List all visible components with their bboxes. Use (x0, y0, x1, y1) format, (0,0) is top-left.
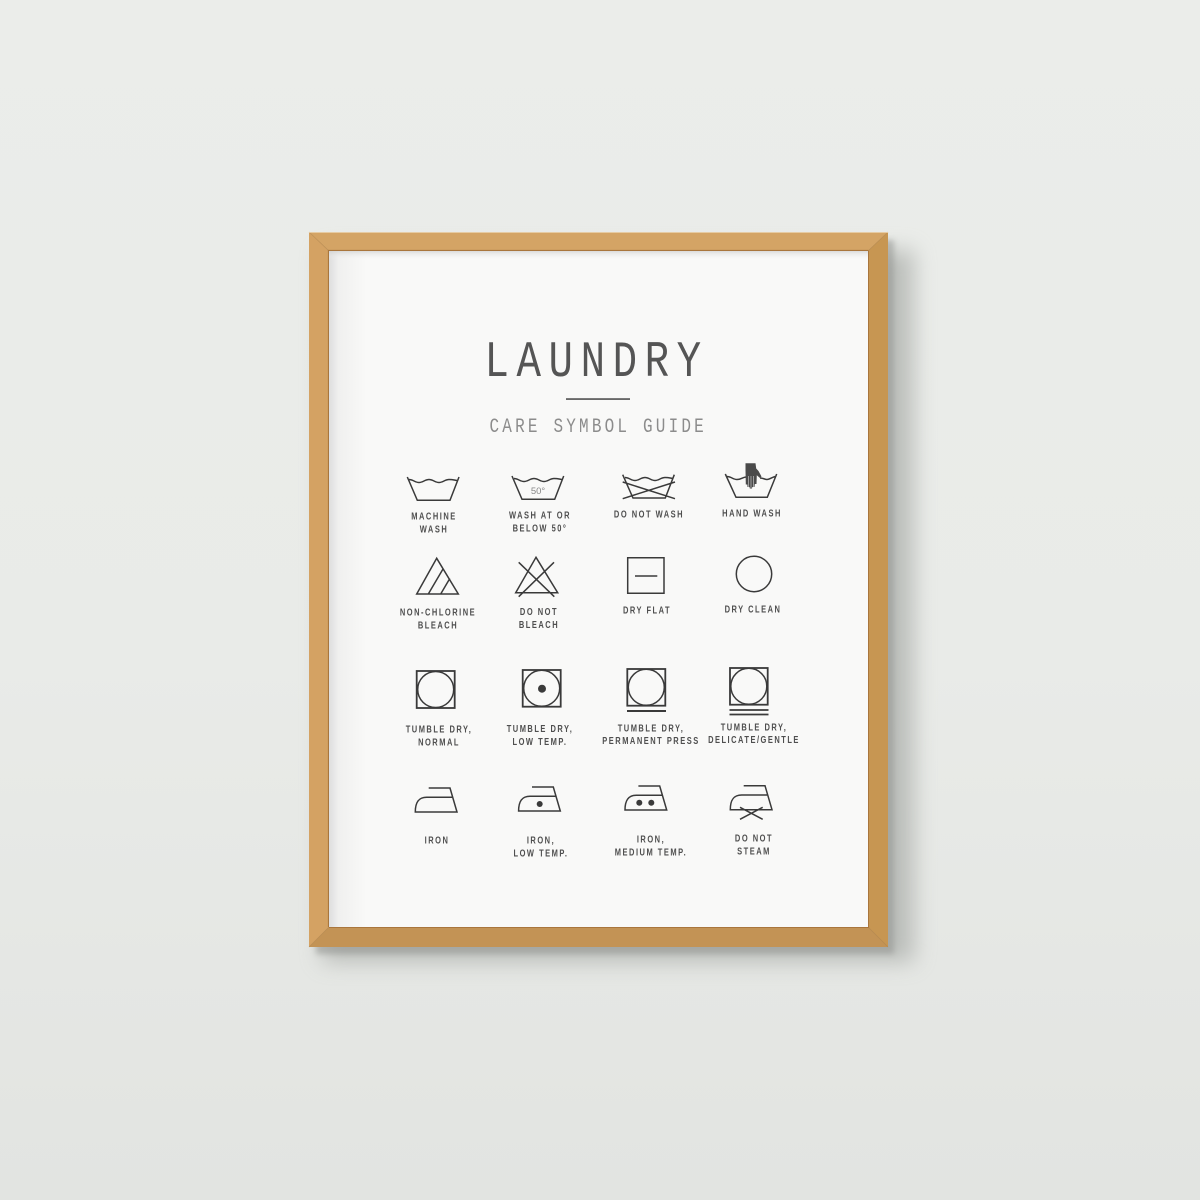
symbol: do not wash (614, 475, 684, 520)
label: machine wash: WASH (420, 523, 448, 535)
symbol: iron medium (615, 786, 687, 858)
label: iron: IRON (425, 834, 449, 846)
label: iron low: IRON, (527, 834, 555, 846)
label: iron medium: MEDIUM TEMP. (615, 846, 687, 858)
label: wash at or below 50: WASH AT OR (509, 509, 571, 521)
label: non-chlorine bleach: NON-CHLORINE (400, 606, 476, 618)
label: tumble dry normal: NORMAL (418, 736, 460, 748)
label: iron medium: IRON, (637, 833, 665, 845)
label: do not wash: DO NOT WASH (614, 508, 684, 520)
label: machine wash: MACHINE (411, 510, 457, 522)
symbol: hand wash (722, 463, 782, 519)
symbol: iron (415, 788, 457, 846)
symbol: tumble dry delicate (708, 668, 800, 745)
icon: crossed triangle (516, 557, 558, 597)
symbol: tumble dry low (507, 670, 573, 747)
symbol: iron low (514, 787, 568, 859)
label: wash at or below 50: BELOW 50° (513, 522, 567, 534)
label: tumble dry delicate: TUMBLE DRY, (721, 721, 787, 733)
symbol: do not bleach (516, 557, 559, 630)
label: dry clean: DRY CLEAN (725, 603, 781, 615)
icon: circle (736, 556, 772, 592)
icon: striped triangle (417, 558, 458, 594)
icon: crossed iron (730, 786, 772, 819)
title: LAUNDRY (484, 334, 701, 391)
icon: tub with 50 degrees: 50° (531, 486, 545, 497)
label: do not bleach: BLEACH (519, 619, 559, 630)
label: do not steam: STEAM (737, 845, 771, 857)
label: tumble dry permanent press: TUMBLE DRY, (618, 722, 684, 734)
wooden frame (309, 232, 888, 947)
label: tumble dry normal: TUMBLE DRY, (406, 723, 472, 735)
symbol: dry clean (725, 556, 781, 615)
icon: iron with one dot (519, 787, 560, 811)
symbol: non-chlorine bleach (400, 558, 476, 631)
icon: tub with hand (725, 463, 777, 497)
icon: square with circle (417, 671, 455, 708)
symbol: do not steam (730, 786, 773, 857)
label: tumble dry low: LOW TEMP. (513, 736, 567, 747)
symbol: wash at or below 50 (509, 476, 571, 534)
label: iron low: LOW TEMP. (514, 847, 568, 859)
title divider (566, 398, 630, 400)
icon: iron (415, 788, 457, 812)
icon: crossed tub (623, 475, 675, 499)
symbol: dry flat (623, 558, 671, 616)
icon: square, circle and dot (523, 670, 561, 707)
label: tumble dry low: TUMBLE DRY, (507, 723, 573, 734)
symbol: tumble dry permanent press (602, 669, 700, 746)
frame shadow (316, 240, 914, 962)
label: tumble dry permanent press: PERMANENT PRESS (602, 735, 700, 746)
symbol: tumble dry normal (406, 671, 472, 748)
icon: square with dash (628, 558, 664, 593)
symbol: machine wash (407, 477, 459, 535)
label: do not bleach: DO NOT (520, 606, 558, 617)
label: hand wash: HAND WASH (722, 507, 782, 519)
subtitle: CARE SYMBOL GUIDE (490, 415, 704, 439)
label: do not steam: DO NOT (735, 832, 773, 844)
icon: square, circle and one bar (627, 669, 666, 711)
icon: wash tub (407, 477, 459, 500)
label: dry flat: DRY FLAT (623, 604, 671, 616)
icon: iron with two dots (625, 786, 667, 810)
icon: square, circle and two bars (730, 668, 768, 714)
art print panel (329, 251, 868, 927)
label: tumble dry delicate: DELICATE/GENTLE (708, 734, 800, 745)
label: non-chlorine bleach: BLEACH (418, 619, 458, 631)
